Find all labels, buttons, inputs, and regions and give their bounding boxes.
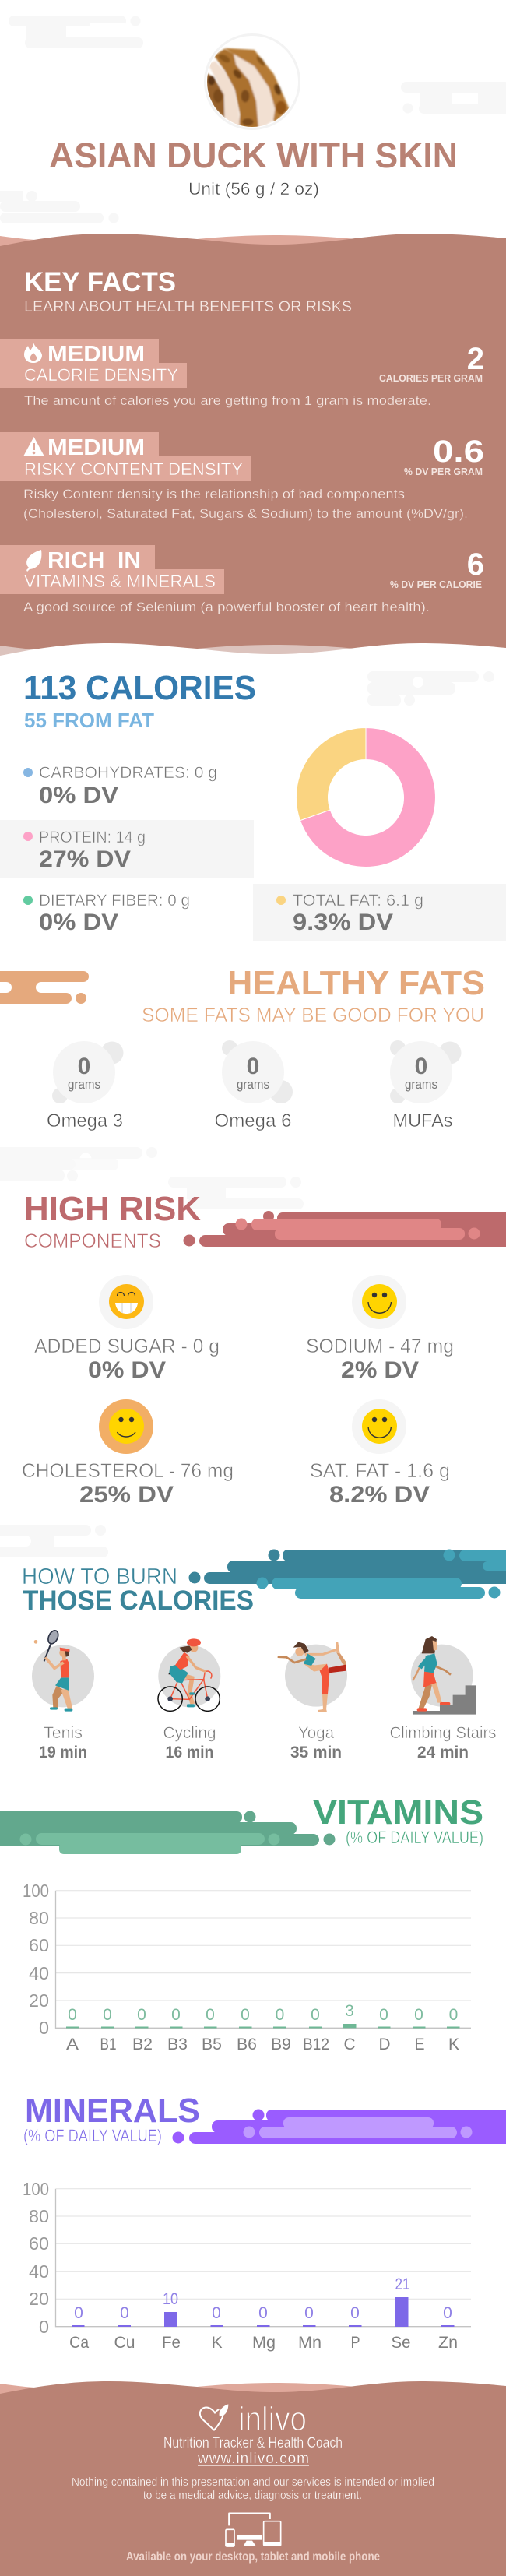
logo: inlivo [200, 2400, 307, 2438]
fact: calorie density: CALORIE DENSITY [24, 365, 178, 385]
legend: protein [0, 820, 254, 878]
disclaimer [72, 2476, 434, 2502]
bar chart: vitamins: 0 [379, 2006, 388, 2024]
icon: stair climber [411, 1636, 476, 1715]
risk: added sugar: 0% DV [88, 1357, 166, 1383]
risk: added sugar: ADDED SUGAR - 0 g [34, 1336, 220, 1357]
bar chart: vitamins: 20 [29, 1990, 49, 2011]
fact: risky content density: MEDIUM [47, 435, 145, 460]
heading: key facts: KEY FACTS [24, 267, 176, 297]
stat: mufas: MUFAs [392, 1110, 453, 1131]
bar chart: minerals: 0 [443, 2304, 452, 2322]
label: tennis: 19 min [39, 1744, 87, 1761]
label: climbing stairs: Climbing Stairs [389, 1724, 497, 1742]
bar chart: vitamins: B9 [271, 2036, 291, 2053]
bar chart: vitamins: 0 [241, 2006, 250, 2024]
decoration: burn bars [188, 1550, 506, 1599]
sub-heading: healthy fats: SOME FATS MAY BE GOOD FOR YOU [142, 1005, 484, 1026]
panel: vitamins [0, 1794, 483, 2053]
bar chart: minerals: Fe [162, 2334, 181, 2352]
risk: sodium: 2% DV [341, 1357, 419, 1383]
fact: rich in vitamins and minerals: 6 [467, 547, 484, 582]
title: ASIAN DUCK WITH SKIN [49, 135, 458, 175]
bar chart: vitamins: D [378, 2036, 391, 2053]
bar chart: vitamins: B3 [167, 2036, 188, 2053]
heading: high risk: HIGH RISK [24, 1191, 202, 1228]
label: climbing stairs: 24 min [417, 1744, 469, 1761]
bar chart: minerals: 40 [29, 2261, 49, 2282]
label: cycling: Cycling [163, 1724, 216, 1742]
bar chart: minerals: 60 [29, 2233, 49, 2254]
donut chart [296, 727, 435, 867]
label: climbing stairs [389, 1724, 497, 1761]
bar chart: minerals: 0 [120, 2304, 129, 2322]
bar chart: vitamins: 0 [39, 2018, 49, 2038]
fact: risky content density: (Cholesterol, Saturated Fat, Sugars & Sodium) to the amount (%DV/gr). [23, 506, 468, 521]
legend: total fat: 9.3% DV [293, 910, 393, 935]
panel: healthy fats [0, 965, 485, 1131]
label: yoga: 35 min [290, 1744, 342, 1761]
sub-heading: minerals: (% OF DAILY VALUE) [23, 2126, 162, 2145]
bar chart: minerals: 0 [212, 2304, 221, 2322]
bar chart: minerals: Ca [69, 2334, 89, 2352]
bar chart: vitamins: B12 [303, 2036, 329, 2053]
bar chart: minerals: 0 [350, 2304, 360, 2322]
stat: mufas: 0 [415, 1054, 427, 1079]
label: tennis [39, 1724, 87, 1761]
risk: sodium: SODIUM - 47 mg [306, 1336, 454, 1357]
bar chart: vitamins: 60 [29, 1935, 49, 1955]
heading: minerals: MINERALS [25, 2092, 200, 2130]
disclaimer: to be a medical advice, diagnosis or treatment. [143, 2489, 362, 2502]
icon: yoga pose [278, 1642, 347, 1712]
risk: cholesterol: 25% DV [79, 1482, 174, 1508]
fact: calorie density: CALORIES PER GRAM [379, 372, 483, 384]
bar chart: vitamins: 0 [171, 2006, 181, 2024]
bar chart: vitamins: 100 [23, 1881, 49, 1901]
stat: mufas: grams [405, 1077, 437, 1092]
sub-heading: key facts: LEARN ABOUT HEALTH BENEFITS OR RISKS [24, 298, 352, 315]
panel: key facts [0, 234, 506, 667]
legend: dietary fiber [23, 892, 190, 935]
stat: mufas [390, 1040, 461, 1131]
fact: risky content density: RISKY CONTENT DENSITY [24, 459, 243, 479]
bar chart: vitamins: 0 [206, 2006, 215, 2024]
legend: total fat [253, 884, 506, 941]
stat: omega 3: grams [68, 1077, 100, 1092]
panel: calories [0, 670, 506, 941]
decoration: vitamins bars [0, 1811, 335, 1854]
availability note: Available on your desktop, tablet and mobile phone [126, 2550, 380, 2564]
bar chart: minerals: 0 [74, 2304, 83, 2322]
bar chart: vitamins: 0 [137, 2006, 146, 2024]
legend: carbohydrates [23, 764, 217, 808]
bar chart: vitamins: 0 [449, 2006, 458, 2024]
risk: cholesterol [22, 1399, 234, 1508]
sub-heading: from fat: 55 FROM FAT [24, 709, 154, 732]
bar chart: minerals: 21 [395, 2275, 409, 2293]
decoration: healthy fats bars [0, 971, 89, 1004]
bar chart: vitamins: 0 [311, 2006, 320, 2024]
bar chart: vitamins: 0 [68, 2006, 77, 2024]
icon: cyclist [158, 1638, 220, 1711]
disclaimer: Nothing contained in this presentation and our services is intended or implied [72, 2476, 434, 2489]
bar chart: minerals: K [212, 2334, 223, 2352]
bar chart: minerals: P [350, 2334, 360, 2352]
bar chart: minerals: 0 [258, 2304, 268, 2322]
unit subtitle: Unit (56 g / 2 oz) [188, 179, 319, 199]
stat: omega 3: Omega 3 [47, 1110, 123, 1131]
tagline: Nutrition Tracker & Health Coach [163, 2435, 343, 2451]
legend: protein: 27% DV [39, 846, 131, 872]
fact: risky content density: % DV PER GRAM [404, 466, 483, 477]
bar chart: minerals: 10 [163, 2290, 178, 2308]
bar chart: minerals: 80 [29, 2206, 49, 2226]
label: yoga [290, 1724, 342, 1761]
bar chart: minerals: Cu [114, 2334, 135, 2352]
fact: rich in vitamins and minerals: A good source of Selenium (a powerful booster of heart health). [23, 600, 430, 614]
risk: saturated fat: SAT. FAT - 1.6 g [310, 1460, 450, 1482]
fact: rich in vitamins and minerals: % DV PER CALORIE [390, 579, 482, 590]
bar chart: vitamins: 0 [276, 2006, 284, 2024]
stat: omega 6 [215, 1040, 293, 1131]
bar chart: vitamins: E [414, 2036, 425, 2053]
fact: rich in vitamins and minerals: VITAMINS & MINERALS [24, 572, 216, 591]
fact: calorie density [0, 339, 484, 408]
legend: carbohydrates: CARBOHYDRATES: 0 g [39, 764, 217, 782]
bar chart: minerals [23, 2179, 471, 2352]
label: yoga: Yoga [298, 1724, 334, 1742]
bar chart: minerals: 0 [304, 2304, 314, 2322]
fact: rich in vitamins and minerals [0, 545, 484, 614]
stat: omega 6: 0 [247, 1054, 259, 1079]
bar chart: vitamins: B1 [100, 2036, 117, 2053]
heading: those calories: THOSE CALORIES [23, 1585, 254, 1616]
heading: calories: 113 CALORIES [23, 670, 256, 707]
bar chart: minerals: Zn [438, 2334, 458, 2352]
panel: burn calories [22, 1550, 506, 1761]
bar chart: minerals: Mg [252, 2334, 276, 2352]
bar chart: minerals: 0 [39, 2317, 49, 2337]
bar chart: vitamins: B2 [132, 2036, 153, 2053]
fact: calorie density: The amount of calories you are getting from 1 gram is moderate. [24, 393, 431, 408]
bar chart: vitamins: 0 [103, 2006, 112, 2024]
header clouds [0, 16, 506, 223]
stat: omega 6: grams [237, 1077, 269, 1092]
risk: saturated fat: 8.2% DV [329, 1482, 430, 1508]
risk: added sugar [34, 1275, 220, 1383]
bar chart: vitamins: 80 [29, 1908, 49, 1928]
label: tennis: Tenis [44, 1724, 83, 1742]
bar chart: minerals: Mn [298, 2334, 322, 2352]
legend: dietary fiber: DIETARY FIBER: 0 g [39, 892, 190, 910]
stat: omega 3: 0 [78, 1054, 90, 1079]
decoration: minerals bars [173, 2109, 506, 2144]
legend: dietary fiber: 0% DV [39, 910, 118, 935]
decoration: high risk bars [184, 1211, 506, 1247]
heading: healthy fats: HEALTHY FATS [227, 965, 485, 1002]
bar chart: vitamins: K [448, 2036, 459, 2053]
risk: saturated fat [310, 1399, 450, 1508]
label: cycling [163, 1724, 216, 1761]
fact: risky content density: 0.6 [433, 435, 484, 469]
bar chart: vitamins: A [66, 2036, 79, 2053]
risk: sodium [306, 1275, 454, 1383]
fact: risky content density: Risky Content density is the relationship of bad components [23, 487, 405, 501]
food photo [206, 34, 299, 130]
heading: how to burn: HOW TO BURN [22, 1564, 177, 1589]
panel: minerals [23, 2092, 506, 2352]
bar chart: vitamins [23, 1881, 471, 2053]
stat: omega 6: Omega 6 [215, 1110, 291, 1131]
legend: total fat: TOTAL FAT: 6.1 g [293, 892, 423, 910]
sub-heading: components: COMPONENTS [24, 1230, 161, 1252]
icon: tennis player [32, 1629, 94, 1712]
fact: risky content density [0, 432, 484, 521]
bar chart: minerals: 100 [23, 2179, 49, 2199]
bar chart: vitamins: 3 [345, 2002, 354, 2020]
bar chart: minerals: 20 [29, 2289, 49, 2309]
panel: high risk [22, 1191, 506, 1508]
icon: devices [225, 2514, 281, 2546]
background clouds: high risk [0, 1147, 304, 1209]
fact: rich in vitamins and minerals: RICH IN [47, 548, 141, 573]
bar chart: vitamins: 40 [29, 1963, 49, 1983]
stat: omega 3 [47, 1041, 123, 1131]
website link: www.inlivo.com [197, 2451, 309, 2467]
logo: inlivo: inlivo [238, 2400, 307, 2438]
heading: vitamins: VITAMINS [313, 1794, 483, 1832]
bar chart: vitamins: B5 [202, 2036, 222, 2053]
risk: cholesterol: CHOLESTEROL - 76 mg [22, 1460, 234, 1482]
bar chart: vitamins: B6 [237, 2036, 257, 2053]
bar chart: vitamins: C [344, 2036, 355, 2053]
legend: carbohydrates: 0% DV [39, 783, 118, 808]
legend: protein: PROTEIN: 14 g [39, 829, 146, 846]
label: cycling: 16 min [165, 1744, 213, 1761]
bar chart: vitamins: 0 [414, 2006, 423, 2024]
bar chart: minerals: Se [391, 2334, 411, 2352]
background cloud: burn [0, 1525, 108, 1557]
footer [0, 2381, 506, 2576]
fact: calorie density: 2 [467, 342, 484, 376]
fact: calorie density: MEDIUM [47, 342, 145, 367]
